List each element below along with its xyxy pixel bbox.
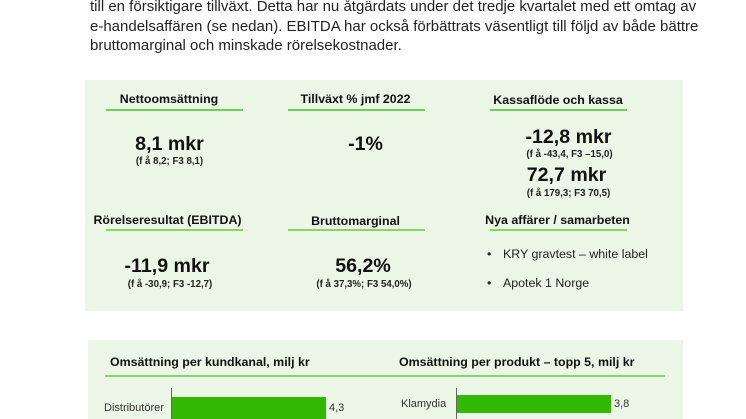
metric: Kassaflöde och kassa: -12,8 mkr: [525, 126, 612, 148]
chart heading: per produkt: Omsättning per produkt – topp 5, milj kr: [399, 355, 634, 369]
metric: Bruttomarginal: Bruttomarginal: [311, 214, 400, 228]
bar chart: kundkanal: 4,3: [329, 402, 344, 414]
metric: Nettoomsättning: 8,1 mkr: [135, 133, 204, 155]
bar chart: kundkanal: [104, 388, 344, 419]
body text paragraph: e-handelsaffären (se nedan). EBITDA har också förbättrats väsentligt till följd av både bättre: [90, 18, 698, 35]
list: Nya affärer / samarbeten: KRY gravtest – white label: [503, 247, 648, 261]
bar chart: kundkanal: Distributörer: [104, 402, 164, 414]
metric: Rörelseresultat: Rörelseresultat (EBITDA): [93, 213, 242, 227]
list: Nya affärer / samarbeten: •: [487, 276, 491, 290]
heading rule: [105, 375, 665, 377]
metric: Kassaflöde och kassa: (f å 179,3; F3 70,5): [527, 188, 610, 199]
metric: Rörelseresultat: -11,9 mkr: [125, 255, 209, 277]
metric: Bruttomarginal: [288, 214, 425, 290]
metric: Nettoomsättning: [106, 92, 243, 167]
metric: Bruttomarginal: 56,2%: [335, 255, 391, 277]
metric: Bruttomarginal: (f å 37,3%; F3 54,0%): [316, 279, 412, 290]
metric: Kassaflöde och kassa: (f å -43,4, F3 –15,0): [526, 149, 613, 160]
list: Nya affärer / samarbeten: [485, 213, 648, 290]
panel: key figures: [85, 80, 683, 311]
list: Nya affärer / samarbeten: Nya affärer / samarbeten: [485, 213, 630, 227]
bar chart: produkt: [401, 388, 629, 419]
bar chart: produkt: 3,8: [614, 398, 629, 410]
bar chart: produkt: Klamydia: [401, 398, 446, 410]
metric: Kassaflöde och kassa: Kassaflöde och kassa: [493, 93, 623, 107]
metric: Tillväxt: -1%: [348, 133, 383, 155]
metric: Nettoomsättning: Nettoomsättning: [120, 92, 218, 106]
list: Nya affärer / samarbeten: •: [487, 247, 491, 261]
list: Nya affärer / samarbeten: Apotek 1 Norge: [503, 276, 589, 290]
metric: Rörelseresultat: (f å -30,9; F3 -12,7): [128, 279, 212, 290]
metric: Rörelseresultat: [93, 213, 243, 290]
chart heading: per kundkanal: Omsättning per kundkanal, milj kr: [110, 355, 310, 369]
metric: Kassaflöde och kassa: 72,7 mkr: [527, 164, 606, 186]
metric: Tillväxt: Tillväxt % jmf 2022: [301, 92, 410, 106]
panel: revenue charts: [88, 340, 683, 419]
metric: Tillväxt: [288, 92, 425, 155]
metric: Kassaflöde och kassa: [490, 93, 627, 199]
body text paragraph: [90, 0, 698, 54]
body text paragraph: bruttomarginal och minskade rörelsekostnader.: [90, 37, 402, 54]
metric: Nettoomsättning: (f å 8,2; F3 8,1): [136, 156, 203, 167]
